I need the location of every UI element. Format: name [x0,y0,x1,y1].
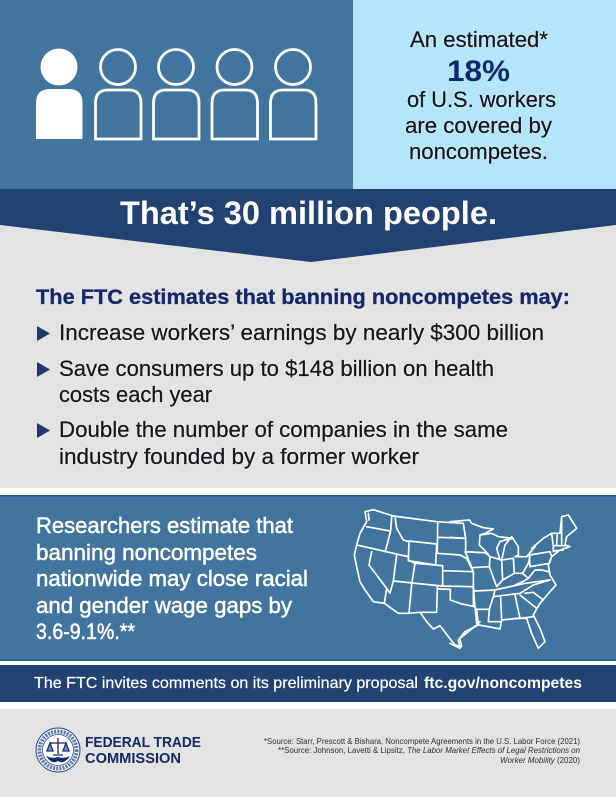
banner: invitation to comment: ftc.gov/noncompetes [424,675,582,692]
text: statistic: noncompetes. [409,139,548,164]
icon: FTC seal [36,728,80,772]
text: sources [264,736,580,765]
text: researchers estimate: nationwide may close racial [36,566,308,591]
text: researchers estimate: banning noncompetes [36,540,257,565]
icon: outlined workers [96,50,316,139]
panel: workers icons [0,0,353,189]
text: sources: Worker Mobility (2020) [500,755,580,765]
banner: invitation to comment [0,665,616,702]
bullet: health costs: Save consumers up to $148 billion on health [59,356,494,381]
logo: Federal Trade Commission: FEDERAL TRADE [85,735,201,751]
text: statistic: 18% [447,55,510,88]
banner: 30 million people [0,189,616,262]
heading: The FTC estimates that banning noncompetes may: [36,286,570,309]
text: researchers estimate [36,513,308,644]
logo: Federal Trade Commission: COMMISSION [85,751,181,767]
text: statistic [405,27,556,164]
text: researchers estimate: and gender wage gaps by [36,593,292,618]
text: sources: **Source: Johnson, Lavetti & Lipsitz, The Labor Market Effects of Legal Restrictions on [278,745,580,755]
panel: researchers and map [0,495,616,661]
bullet: companies: industry founded by a former worker [59,444,419,469]
text: researchers estimate: 3.6-9.1%.** [36,619,135,644]
bullet: companies [37,417,508,469]
icon: filled worker [36,48,82,139]
banner: invitation to comment: The FTC invites comments on its preliminary proposal [34,675,418,692]
bullet: earnings: Increase workers’ earnings by nearly $300 billion [59,320,544,345]
bullet: health costs [37,356,494,407]
text: statistic: An estimated* [410,27,548,52]
logo: Federal Trade Commission [36,728,201,772]
bullet: health costs: costs each year [59,382,212,407]
panel: FTC estimates [36,286,570,469]
text: sources: *Source: Starr, Prescott & Bishara, Noncompete Agreements in the U.S. Labor Force (2021) [264,736,580,746]
map: United States [354,510,577,648]
text: statistic: are covered by [405,113,552,138]
bullet: companies: Double the number of companies in the same [59,417,508,442]
text: researchers estimate: Researchers estimate that [36,513,293,538]
text: statistic: of U.S. workers [407,87,556,112]
panel: 18 percent statistic [353,0,616,189]
banner heading: That’s 30 million people. [120,195,497,231]
